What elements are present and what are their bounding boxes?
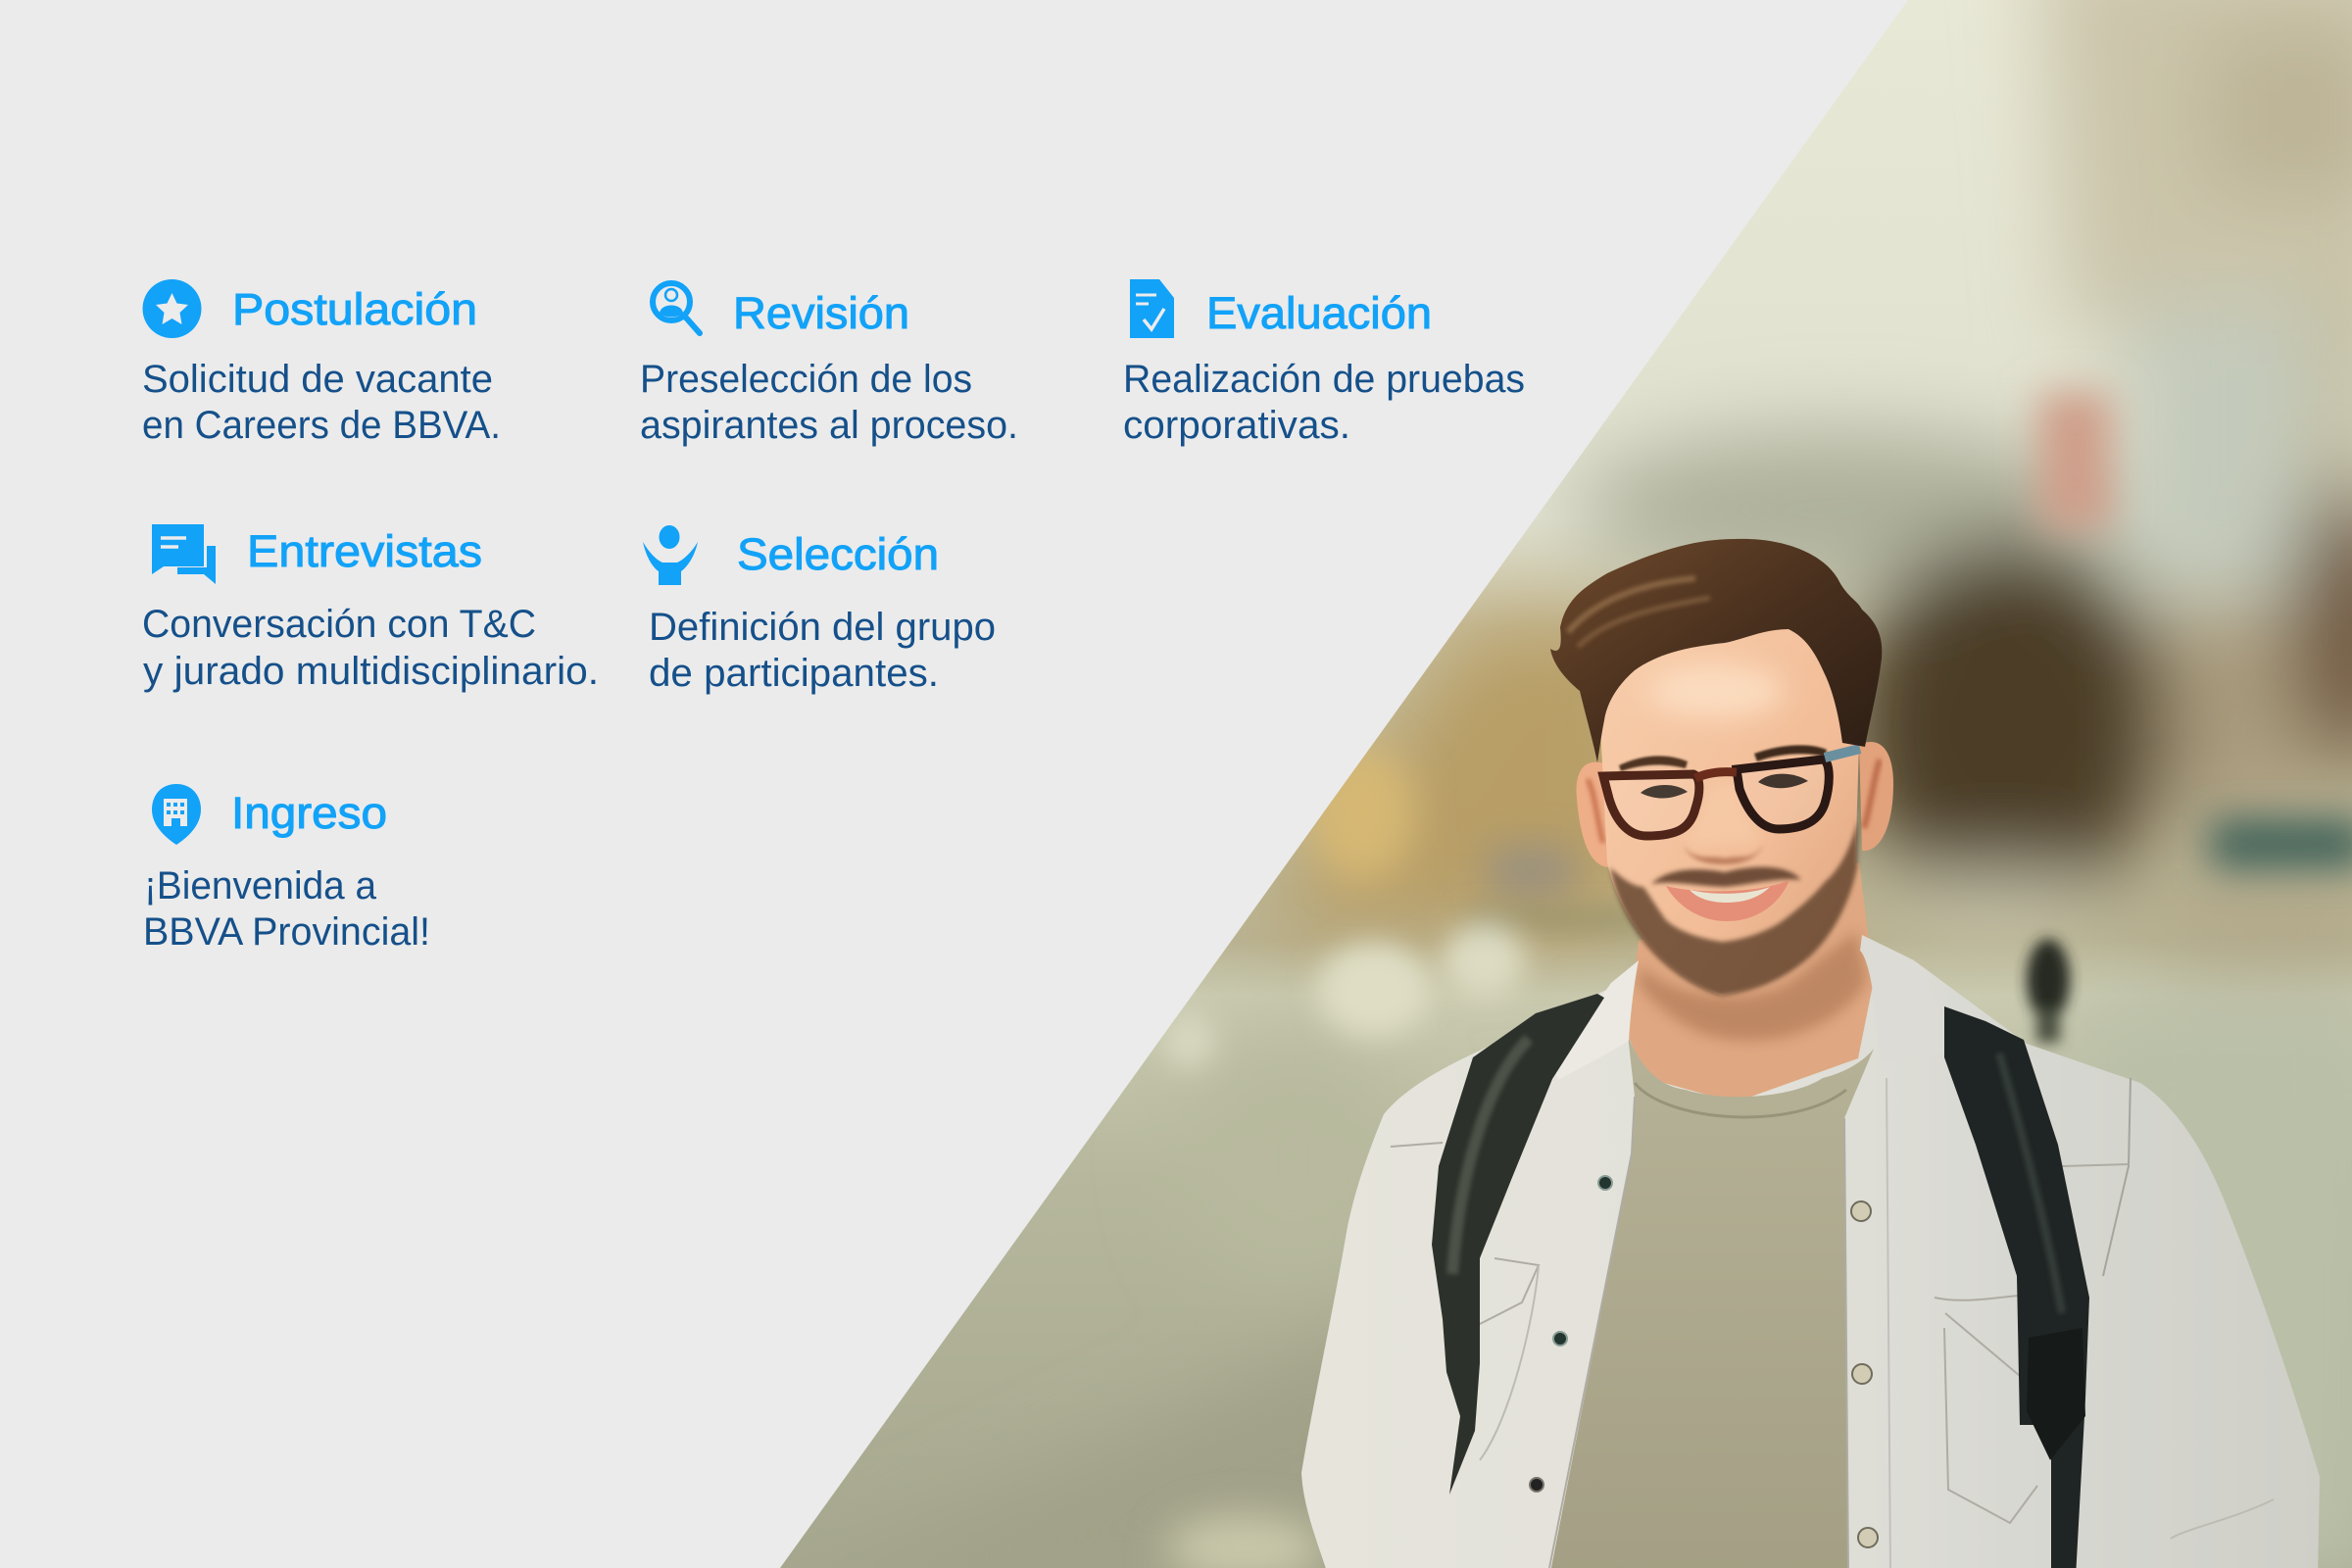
photo: young man with glasses and backpack on a blurred street xyxy=(764,0,2352,1568)
description: ¡Bienvenida a xyxy=(144,864,377,907)
buttons xyxy=(1851,1201,1878,1547)
description: de participantes. xyxy=(649,652,939,695)
eyebrows xyxy=(1619,756,1688,771)
collars xyxy=(1605,960,1639,1041)
icon: document with check xyxy=(1130,279,1174,338)
description: aspirantes al proceso. xyxy=(640,404,1018,447)
icon: person with raised arms xyxy=(643,525,698,585)
glasses xyxy=(1603,749,1860,836)
panel: Ingreso xyxy=(143,784,430,954)
nose xyxy=(1685,848,1762,866)
panel: Entrevistas xyxy=(142,524,599,693)
panel: Evaluación xyxy=(1123,279,1525,447)
heading: Evaluación xyxy=(1206,288,1432,338)
heading: Ingreso xyxy=(231,788,387,838)
description: y jurado multidisciplinario. xyxy=(143,650,599,693)
distant pedestrian xyxy=(2027,939,2070,1043)
moustache xyxy=(1651,867,1801,887)
panel: Revisión xyxy=(640,283,1018,447)
icon: star badge xyxy=(143,279,202,338)
blurred street background xyxy=(764,0,2352,1568)
heading: Entrevistas xyxy=(247,526,482,576)
man: head xyxy=(1550,539,1893,996)
icon: chat bubbles xyxy=(152,524,216,584)
beard xyxy=(1610,818,1858,996)
description: Solicitud de vacante xyxy=(142,358,493,401)
icon: magnifier with person xyxy=(653,283,700,333)
heading: Selección xyxy=(737,529,939,579)
icon: map pin with building xyxy=(152,784,201,845)
face xyxy=(1599,608,1859,996)
neck shadow xyxy=(1639,931,1867,1041)
smile xyxy=(1666,880,1789,921)
heading: Revisión xyxy=(733,288,909,338)
panel: Postulación xyxy=(142,279,501,447)
description: Preselección de los xyxy=(640,358,972,401)
jacket placket and pockets xyxy=(1391,1078,2274,1568)
eyes xyxy=(1641,785,1688,799)
panel: Selección xyxy=(643,525,996,695)
neck xyxy=(1628,862,1874,1102)
ears xyxy=(1577,762,1610,867)
jacket xyxy=(1301,935,2320,1568)
hair xyxy=(1550,539,1882,762)
t-shirt xyxy=(1549,1035,1874,1568)
description: BBVA Provincial! xyxy=(143,910,430,954)
description: Definición del grupo xyxy=(649,606,996,649)
description: Conversación con T&C xyxy=(142,603,536,646)
description: Realización de pruebas xyxy=(1123,358,1525,401)
heading: Postulación xyxy=(232,284,477,334)
description: corporativas. xyxy=(1123,404,1350,447)
man: torso xyxy=(1301,862,2320,1568)
backpack straps xyxy=(1432,994,1604,1494)
description: en Careers de BBVA. xyxy=(142,404,501,447)
forehead highlight xyxy=(1646,663,1784,718)
